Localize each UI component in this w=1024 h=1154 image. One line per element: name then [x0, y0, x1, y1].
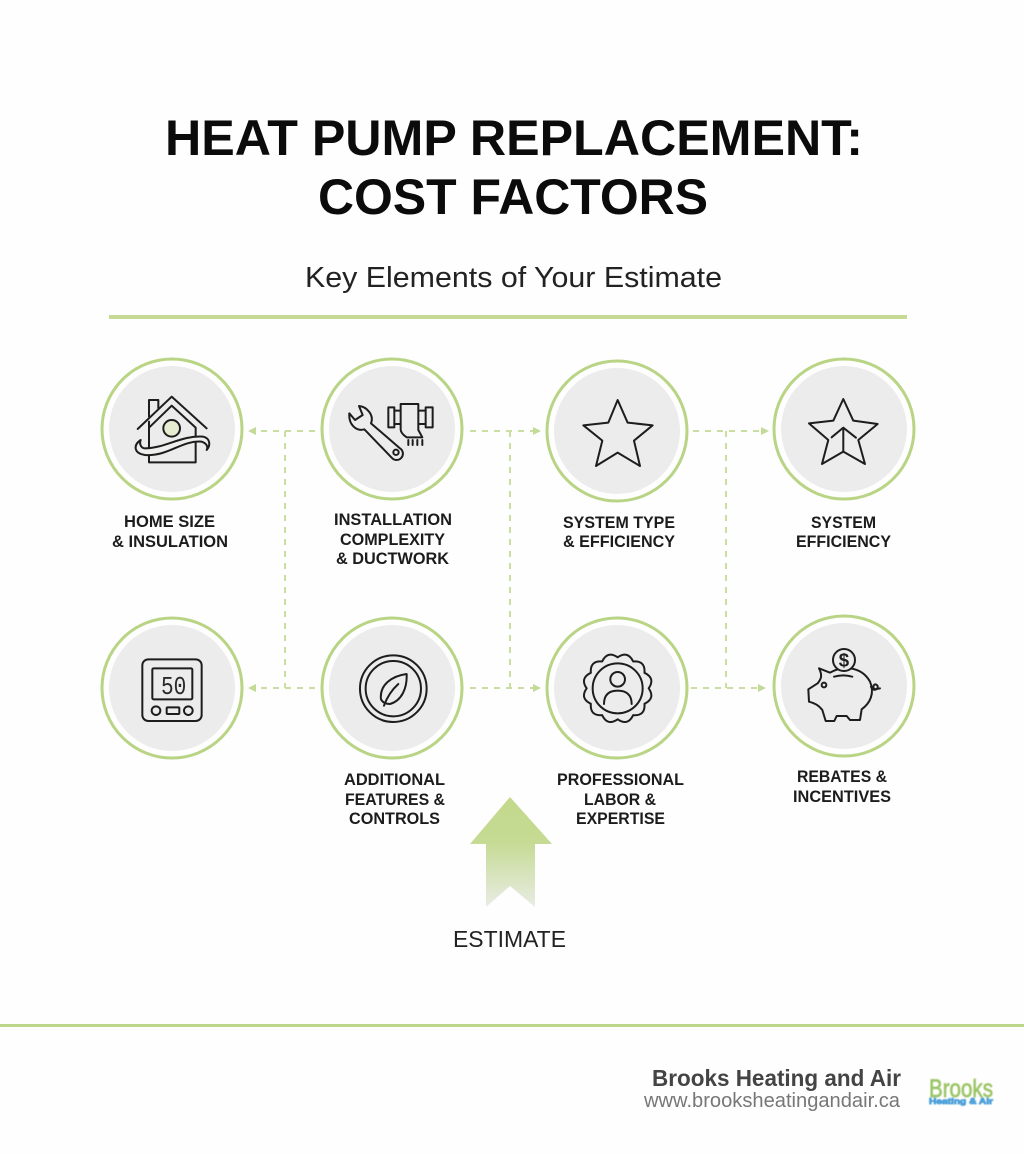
factor: system efficiency: [774, 359, 914, 551]
label: HOME SIZE: [124, 513, 215, 531]
label: INSTALLATION: [334, 511, 452, 529]
label: [796, 514, 891, 551]
label: & EFFICIENCY: [563, 533, 675, 551]
factor: rebates and incentives: [774, 616, 914, 806]
icon: piggy bank with coin: [808, 649, 880, 721]
label: & INSULATION: [112, 533, 228, 551]
label: [344, 771, 445, 828]
arrow: upward to estimate: [470, 797, 552, 907]
icon: piggy bank with coin: $: [839, 650, 850, 671]
label: PROFESSIONAL: [557, 771, 684, 789]
label: REBATES &: [797, 768, 887, 786]
footer: website: www.brooksheatingandair.ca: [643, 1090, 901, 1112]
label: [563, 514, 675, 551]
label: & DUCTWORK: [336, 550, 449, 568]
label: [557, 771, 684, 828]
label: [793, 768, 891, 806]
label: SYSTEM: [811, 514, 876, 532]
label: LABOR &: [584, 791, 656, 809]
factor: home size and insulation: [102, 359, 242, 551]
header divider: [109, 315, 907, 319]
estimate label: ESTIMATE: [453, 926, 566, 952]
icon: wrench and valve: [349, 404, 433, 460]
icon: leaf in circle: [360, 655, 427, 722]
label: EFFICIENCY: [796, 533, 891, 551]
icon: star: [583, 400, 653, 466]
title: HEAT PUMP REPLACEMENT:: [165, 110, 863, 166]
factor: additional features and controls: [322, 618, 462, 828]
logo: Heating & Air: [929, 1097, 993, 1106]
title: COST FACTORS: [318, 169, 708, 225]
footer: company name: Brooks Heating and Air: [652, 1065, 901, 1091]
logo: Brooks: [929, 1075, 993, 1103]
footer divider: [0, 1024, 1024, 1027]
label: [112, 513, 228, 551]
label: [334, 511, 452, 568]
connector: centre branch: [470, 427, 541, 692]
label: EXPERTISE: [576, 810, 665, 828]
subtitle: Key Elements of Your Estimate: [305, 262, 722, 294]
factor: installation complexity and ductwork: [322, 359, 462, 568]
connector: right branch: [691, 427, 769, 692]
icon: certified professional badge: [584, 655, 651, 722]
factor: professional labor and expertise: [547, 618, 687, 828]
label: COMPLEXITY: [340, 531, 445, 549]
factor: system type and efficiency: [547, 361, 687, 551]
label: ADDITIONAL: [344, 771, 445, 789]
icon: house with insulation wrap: [136, 397, 209, 462]
label: FEATURES &: [345, 791, 445, 809]
connector: left branch: [248, 427, 315, 692]
label: SYSTEM TYPE: [563, 514, 675, 532]
icon: star with up arrow: [809, 399, 878, 464]
label: CONTROLS: [349, 810, 440, 828]
factor: thermostat: [102, 618, 242, 758]
title: [165, 110, 863, 225]
icon: digital thermostat: 50: [161, 672, 186, 702]
label: INCENTIVES: [793, 788, 891, 806]
